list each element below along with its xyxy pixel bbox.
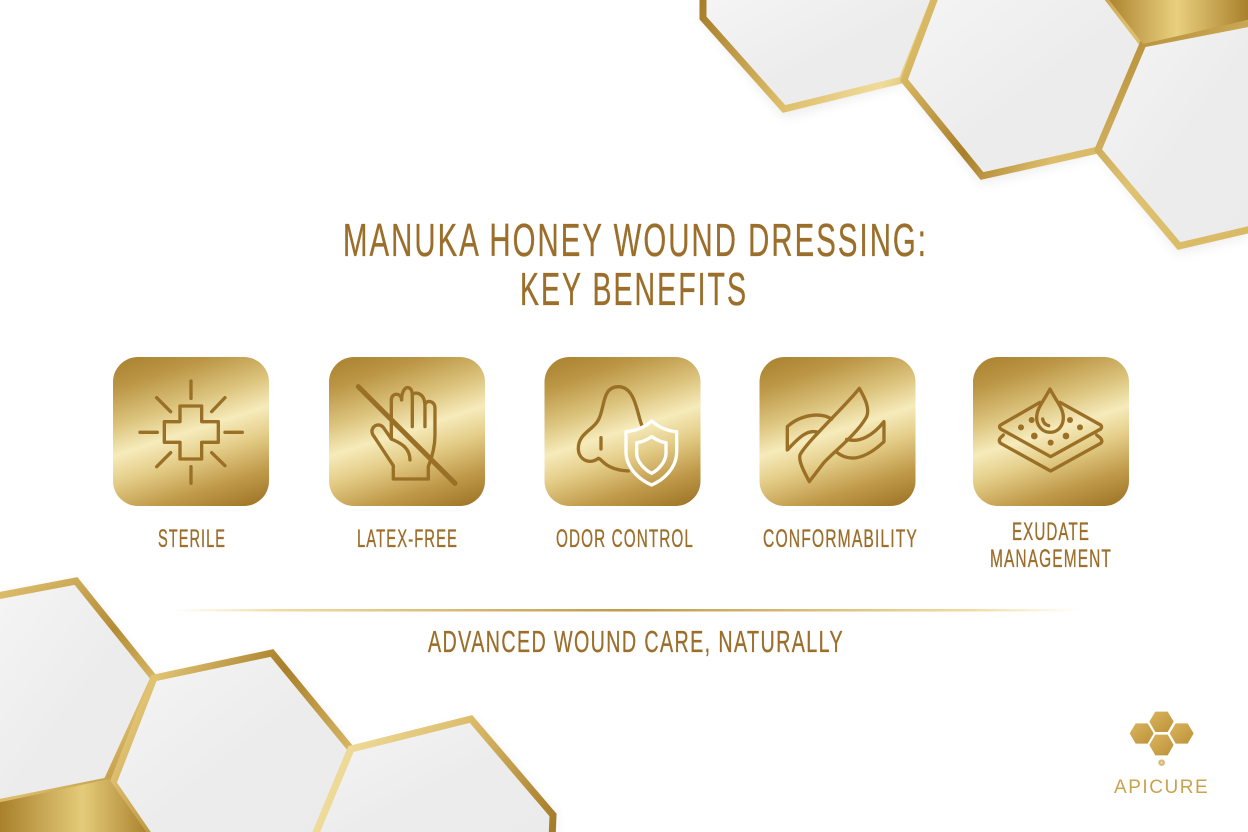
decorative honeycomb: top right	[702, 0, 1248, 254]
benefit: sterile	[113, 357, 269, 553]
tile: odor control icon	[544, 357, 700, 506]
divider rule	[172, 609, 1080, 612]
logo: Apicure	[1114, 712, 1209, 798]
title	[343, 214, 928, 315]
tile: sterile icon	[113, 357, 269, 506]
benefit: exudate management	[973, 357, 1129, 573]
icon: crossed-out hand	[358, 387, 455, 483]
tile: exudate management icon	[973, 357, 1129, 506]
logo wordmark: APICURE	[1114, 777, 1209, 798]
label: conformability: CONFORMABILITY	[763, 525, 918, 553]
label: exudate management	[990, 518, 1112, 573]
benefit: latex-free	[329, 357, 485, 553]
label: exudate management: EXUDATE	[1012, 518, 1090, 546]
logo mark: honeycomb	[1130, 712, 1194, 766]
label: sterile: STERILE	[158, 525, 226, 553]
icon: absorbent layers with drop	[999, 389, 1102, 471]
tile: conformability icon	[760, 357, 916, 506]
label: odor control: ODOR CONTROL	[556, 525, 694, 553]
title: KEY BENEFITS	[520, 263, 748, 315]
label: exudate management: MANAGEMENT	[990, 545, 1112, 573]
benefit: conformability	[760, 357, 918, 553]
decorative honeycomb: bottom left	[0, 581, 556, 832]
icon: nose with shield	[578, 387, 677, 485]
icon: flexible ribbon	[787, 388, 884, 482]
tagline: ADVANCED WOUND CARE, NATURALLY	[428, 624, 844, 659]
tile: latex-free icon	[329, 357, 485, 506]
icon: medical cross with rays	[140, 381, 242, 483]
label: latex-free: LATEX-FREE	[357, 525, 458, 553]
title: MANUKA HONEY WOUND DRESSING:	[343, 214, 928, 266]
benefit: odor control	[544, 357, 700, 553]
